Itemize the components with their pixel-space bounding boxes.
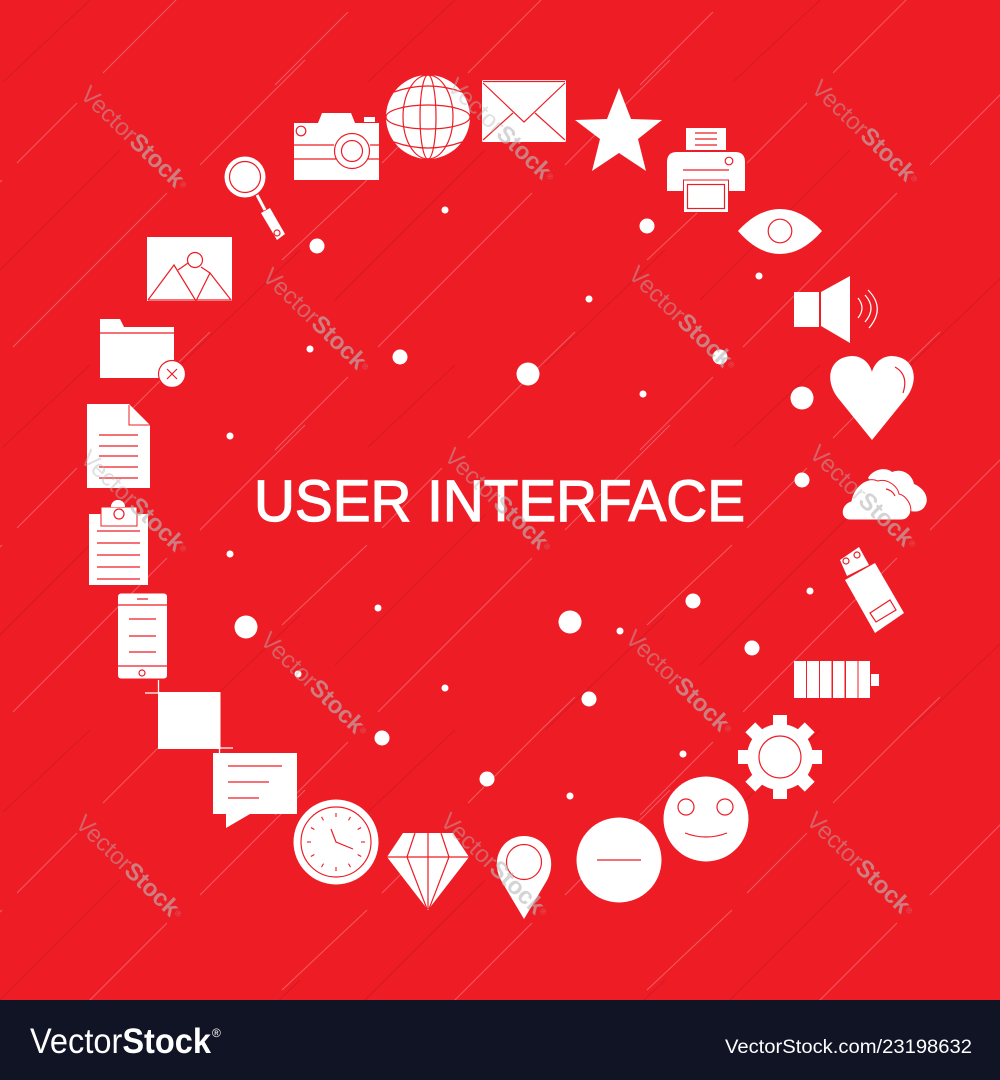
- icon: folder with close badge: [100, 319, 186, 388]
- icon: gear: [738, 715, 822, 799]
- icon: speech bubble: [213, 753, 297, 828]
- icon: star: [575, 88, 662, 171]
- watermarks: VectorStock: [75, 81, 190, 193]
- watermarks: VectorStock: [435, 808, 550, 920]
- icon: globe: [386, 75, 470, 159]
- icon: printer: [667, 128, 745, 212]
- footer logo: VectorStock: [30, 1022, 211, 1061]
- icon: heart: [830, 356, 914, 440]
- icon: usb drive: [840, 547, 904, 633]
- watermarks: ®: [723, 723, 733, 734]
- watermarks: ®: [358, 725, 368, 736]
- icon: speaker: [794, 276, 877, 343]
- watermarks: VectorStock: [623, 261, 738, 373]
- icon: smartphone: [118, 594, 167, 678]
- footer registered mark: ®: [212, 1026, 221, 1040]
- watermarks: VectorStock: [70, 810, 185, 922]
- watermarks: ®: [904, 905, 914, 916]
- footer bar: [0, 1000, 1000, 1080]
- watermarks: ®: [538, 906, 548, 917]
- icon: map pin: [497, 836, 551, 919]
- decorative dots: [226, 206, 814, 800]
- icon: picture: [147, 237, 232, 301]
- watermarks: VectorStock: [442, 73, 557, 185]
- watermarks: ®: [542, 541, 552, 552]
- watermarks: [70, 73, 925, 926]
- watermarks: VectorStock: [801, 807, 916, 919]
- watermarks: VectorStock: [439, 443, 554, 555]
- icon: battery: [794, 661, 879, 698]
- watermarks: ®: [178, 543, 188, 554]
- watermarks: ®: [545, 171, 555, 182]
- icon: clouds: [842, 469, 927, 520]
- watermarks: VectorStock: [620, 625, 735, 737]
- icon: clock: [294, 800, 378, 884]
- icon: crop square: [145, 680, 233, 753]
- watermarks: ®: [907, 538, 917, 549]
- watermarks: ®: [360, 361, 370, 372]
- watermarks: ®: [909, 173, 919, 184]
- icon: smiley: [664, 776, 748, 862]
- watermarks: ®: [726, 359, 736, 370]
- title: USER INTERFACE: [254, 469, 745, 534]
- footer url: VectorStock.com/23198632: [725, 1036, 972, 1058]
- icon: eye: [738, 209, 822, 254]
- watermarks: ®: [173, 908, 183, 919]
- icon: diamond: [387, 833, 469, 910]
- watermarks: VectorStock: [806, 75, 921, 187]
- icon: camera: [294, 113, 379, 180]
- watermarks: ®: [178, 179, 188, 190]
- icon: minus circle: [576, 818, 662, 902]
- icon: envelope: [482, 80, 566, 142]
- icon: document: [87, 404, 150, 488]
- icon: magnifier: [224, 156, 285, 240]
- watermarks: VectorStock: [257, 263, 372, 375]
- watermarks: VectorStock: [75, 445, 190, 557]
- watermarks: VectorStock: [255, 627, 370, 739]
- watermarks: VectorStock: [804, 440, 919, 552]
- icon: clipboard: [89, 500, 148, 585]
